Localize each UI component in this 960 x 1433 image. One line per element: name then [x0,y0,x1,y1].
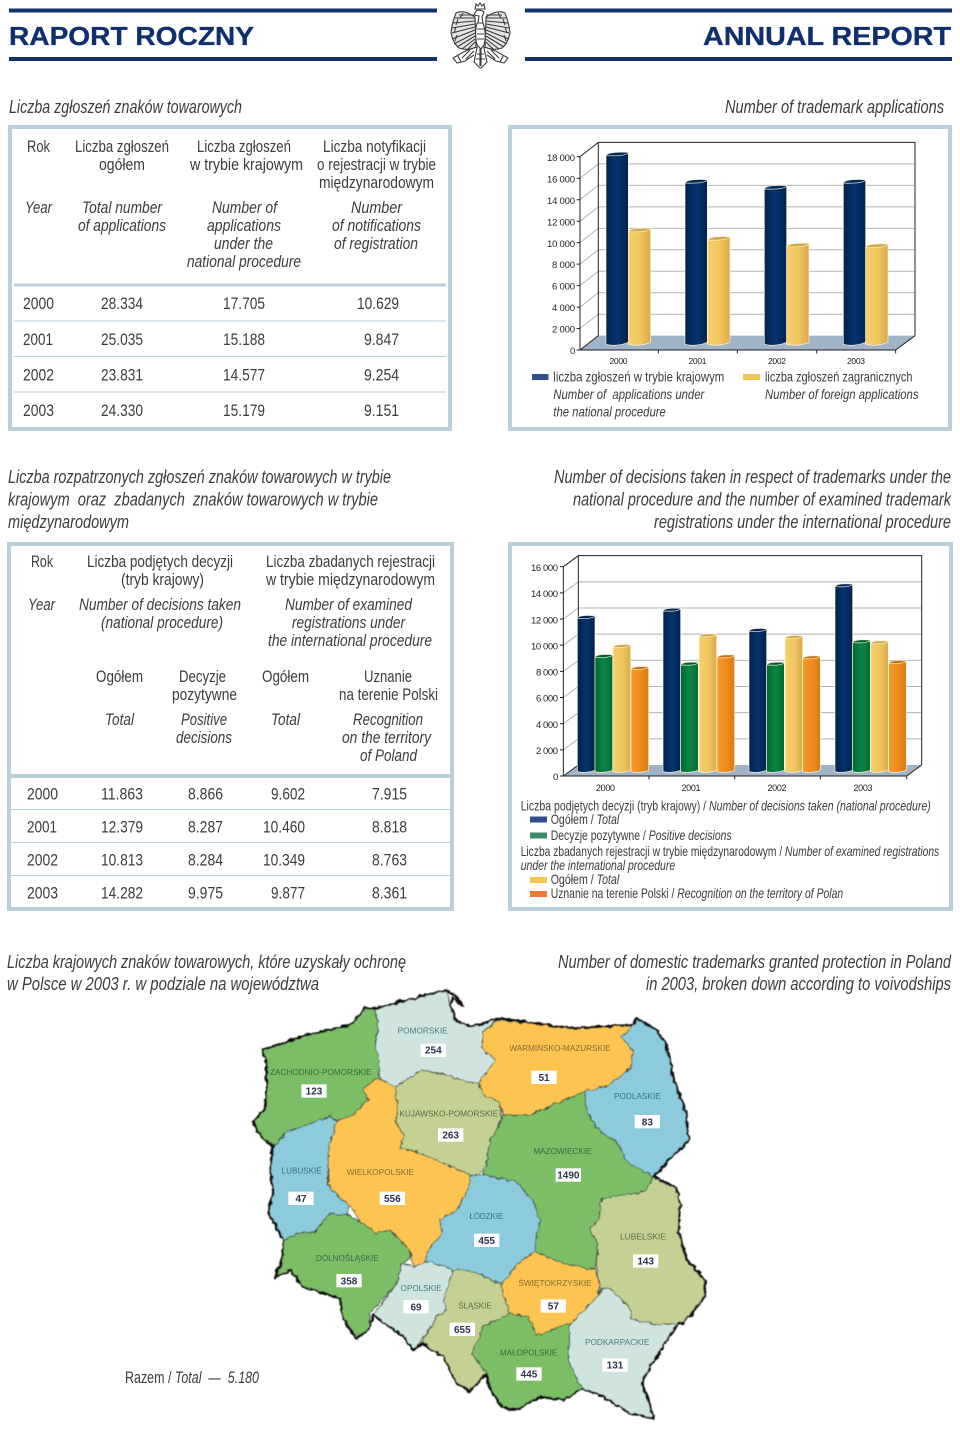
chart axis labels: 2 000 [536,746,558,757]
table rows: 12.379 [101,818,143,837]
table rows: 25.035 [101,330,143,349]
voivodship values [288,1044,660,1381]
chart legend: Ogółem / Total [551,871,620,887]
chart legend: Number of foreign applications [765,386,918,402]
table rows: 8.866 [188,785,223,804]
chart legend: Decyzje pozytywne / Positive decisions [551,827,732,843]
chart legend: the national procedure [553,404,666,420]
table header text: (national procedure) [101,613,223,632]
voivodship names: LUBUSKIE [282,1166,322,1176]
chart legend [532,368,918,420]
table rows: 10.629 [357,294,399,313]
table rows: 9.602 [271,785,305,804]
table rows: 9.254 [364,366,399,385]
table header text: w trybie krajowym [189,155,303,174]
heading: voivodships (EN) [558,952,952,994]
table header text: applications [207,216,281,235]
voivodship values: 655 [454,1325,471,1336]
table header text: Total number [82,198,163,217]
voivodship names: POMORSKIE [398,1025,448,1035]
table header text: Total [105,710,135,729]
heading: decisions (EN) [554,467,952,532]
chart legend: liczba zgłoszeń w trybie krajowym [553,368,724,384]
table rows: 8.763 [372,851,407,870]
heading: voivodships (PL): Liczba krajowych znaków towarowych, które uzyskały ochronę [7,952,406,972]
table header text: (tryb krajowy) [121,570,204,589]
chart axis labels: 8 000 [552,260,575,271]
voivodship names: MAZOWIECKIE [533,1146,592,1156]
header: English title: ANNUAL REPORT [703,21,951,51]
table header text: Total [271,710,301,729]
table rows: 2000 [23,294,54,313]
heading: voivodships (PL) [7,952,406,994]
voivodship values: 57 [548,1302,559,1313]
table rows: 9.877 [271,884,305,903]
chart axis labels [547,153,865,366]
table header text: pozytywne [172,685,237,704]
table header text: Number of examined [285,595,412,614]
panel: table of trademark applications [10,127,450,429]
heading: decisions (PL): Liczba rozpatrzonych zgłoszeń znaków towarowych w trybie [8,467,391,487]
table header text: Liczba zgłoszeń [197,137,291,156]
table rows [27,785,407,903]
chart legend: liczba zgłoszeń zagranicznych [765,368,912,384]
voivodship names: ŚWIĘTOKRZYSKIE [518,1277,592,1288]
table header text: of notifications [332,216,421,235]
voivodship names: MAŁOPOLSKIE [500,1348,558,1358]
table header text: registrations under [292,613,406,632]
voivodship names: OPOLSKIE [401,1283,442,1293]
header: English title [525,8,952,61]
table header text: Year [28,595,56,614]
voivodship values: 123 [306,1087,323,1098]
voivodship values: 358 [341,1276,358,1287]
chart legend: Ogółem / Total [551,811,620,827]
voivodship names: PODLASKIE [614,1091,661,1101]
heading: voivodships (PL): w Polsce w 2003 r. w podziale na województwa [7,974,319,994]
chart axis labels: 6 000 [536,694,558,704]
table header text: the international procedure [268,631,432,650]
chart legend: under the international procedure [521,857,675,873]
table header text: under the [214,234,273,253]
table header text: międzynarodowym [319,173,434,192]
heading: decisions (PL) [8,467,391,532]
total caption: Razem / Total — 5.180 [125,1368,259,1387]
table rows: 14.577 [223,366,265,385]
chart legend: Uznanie na terenie Polski / Recognition on the territory of Polan [551,885,843,901]
table rows: 10.813 [101,851,143,870]
table header text [28,552,438,765]
voivodship values: 254 [425,1046,442,1057]
header: Polish title [9,8,437,61]
table rows: 14.282 [101,884,143,903]
table rows [23,294,399,420]
table header text: Decyzje [179,667,226,686]
chart axis labels: 18 000 [547,153,575,164]
chart axis labels: 2001 [682,783,700,793]
voivodship names: ZACHODNIO-POMORSKIE [270,1067,372,1077]
voivodship values: 69 [410,1302,422,1313]
table header text: Recognition [353,710,423,729]
chart axis labels: 12 000 [531,616,558,626]
chart axis labels: 0 [570,346,575,357]
table rows: 9.975 [188,884,223,903]
chart axis labels: 10 000 [531,642,558,652]
voivodship values: 263 [442,1131,459,1142]
voivodship names: DOLNOŚLĄSKIE [316,1252,379,1263]
table header text: Year [25,198,53,217]
table rows: 10.460 [263,818,305,837]
panel: bar chart of decisions [510,544,951,909]
voivodship values: 1490 [557,1171,580,1182]
voivodship names: ŚLĄSKIE [458,1300,492,1311]
table header text: w trybie międzynarodowym [265,570,435,589]
map: Poland by voivodship [253,990,705,1418]
heading: trademark applications (PL): Liczba zgłoszeń znaków towarowych [9,97,242,117]
chart axis labels: 16 000 [547,174,575,186]
voivodship names: WARMIŃSKO-MAZURSKIE [509,1043,611,1053]
chart axis labels: 4 000 [552,303,575,314]
panel: bar chart of applications [510,127,950,429]
chart legend [521,798,939,901]
table rows: 2001 [23,330,53,349]
table header text: Positive [181,710,227,729]
chart axis labels: 2002 [768,356,786,366]
table rows: 8.287 [188,818,223,837]
chart axis labels: 2002 [768,783,786,793]
table header text: on the territory [342,728,432,747]
chart axis labels: 2 000 [552,324,575,336]
table rows: 2003 [27,884,58,903]
table header text: Liczba zgłoszeń [75,137,169,156]
chart axis labels: 14 000 [531,589,558,600]
voivodship values: 455 [478,1236,495,1247]
table header text: o rejestracji w trybie [317,155,436,174]
voivodship names: KUJAWSKO-POMORSKIE [399,1109,499,1119]
table header text: national procedure [187,252,301,271]
table header text: of Poland [360,746,417,765]
voivodship values: 445 [521,1370,538,1381]
chart axis labels: 2001 [688,356,707,366]
chart axis labels: 0 [553,772,558,783]
chart axis labels: 4 000 [536,720,558,731]
table rows: 17.705 [223,294,265,313]
voivodship values: 51 [538,1073,550,1084]
table header text: na terenie Polski [339,685,438,704]
table header text: Liczba zbadanych rejestracji [266,552,435,571]
voivodship names: ŁÓDZKIE [469,1211,504,1221]
table header text: Liczba notyfikacji [323,137,426,156]
table header text: of registration [334,234,418,253]
panel: table of decisions [9,544,452,909]
table rows: 2001 [27,818,57,837]
table rows: 8.818 [372,818,407,837]
voivodship values: 83 [642,1117,653,1128]
table rows: 24.330 [101,401,143,420]
bar chart frame and bars [560,556,922,779]
table rows: 15.179 [223,401,265,420]
bar chart frame and bars [577,142,915,353]
table header text: Liczba podjętych decyzji [87,552,233,571]
heading: decisions (PL): międzynarodowym [8,512,129,532]
voivodship names: WIELKOPOLSKIE [347,1167,414,1177]
table rows: 10.349 [263,851,305,870]
table rows: 2002 [27,851,58,870]
table rows: 23.831 [101,366,143,385]
table rows: 2003 [23,401,54,420]
chart axis labels: 2000 [596,783,615,793]
chart axis labels: 16 000 [531,563,558,574]
table header text: Ogółem [96,667,143,686]
table header text [25,137,436,271]
voivodship values: 143 [637,1257,654,1268]
header: Polish title: RAPORT ROCZNY [9,21,254,51]
table rows: 2000 [27,785,58,804]
voivodship names: LUBELSKIE [620,1231,666,1241]
table header text: of applications [78,216,166,235]
table header text: Number [351,198,403,217]
voivodship values: 131 [607,1361,624,1372]
voivodship values: 556 [384,1194,401,1205]
voivodship shapes and country outline [253,990,705,1418]
table rows: 28.334 [101,294,143,313]
chart axis labels: 2003 [854,783,872,793]
chart axis labels: 12 000 [547,218,575,228]
table header text: Rok [27,137,50,156]
table header text: ogółem [99,155,145,174]
icon: Polish white eagle emblem [451,3,510,68]
chart axis labels: 2003 [847,356,865,366]
table header text: Number of [212,198,279,217]
voivodship names [270,1025,666,1358]
heading: decisions (PL): krajowym oraz zbadanych znaków towarowych w trybie [8,490,378,510]
chart axis labels [531,563,872,793]
table rows: 8.361 [372,884,407,903]
chart axis labels: 8 000 [536,668,558,678]
table header text: Number of decisions taken [79,595,241,614]
chart axis labels: 14 000 [547,196,575,207]
table header text: Uznanie [364,667,412,686]
table header text: decisions [176,728,232,747]
table rows: 8.284 [188,851,223,870]
chart legend: Number of applications under [553,386,705,402]
table rows: 7.915 [372,785,407,804]
chart axis labels: 10 000 [547,239,575,250]
table rows: 11.863 [101,785,143,804]
chart axis labels: 2000 [610,356,628,366]
table rows: 9.847 [364,330,399,349]
table header text: Ogółem [262,667,309,686]
table rows: 9.151 [364,401,399,420]
table rows: 2002 [23,366,54,385]
voivodship names: PODKARPACKIE [585,1337,650,1347]
table header text: Rok [31,552,53,571]
chart axis labels: 6 000 [552,282,575,292]
table rows: 15.188 [223,330,265,349]
voivodship values: 47 [295,1194,307,1205]
